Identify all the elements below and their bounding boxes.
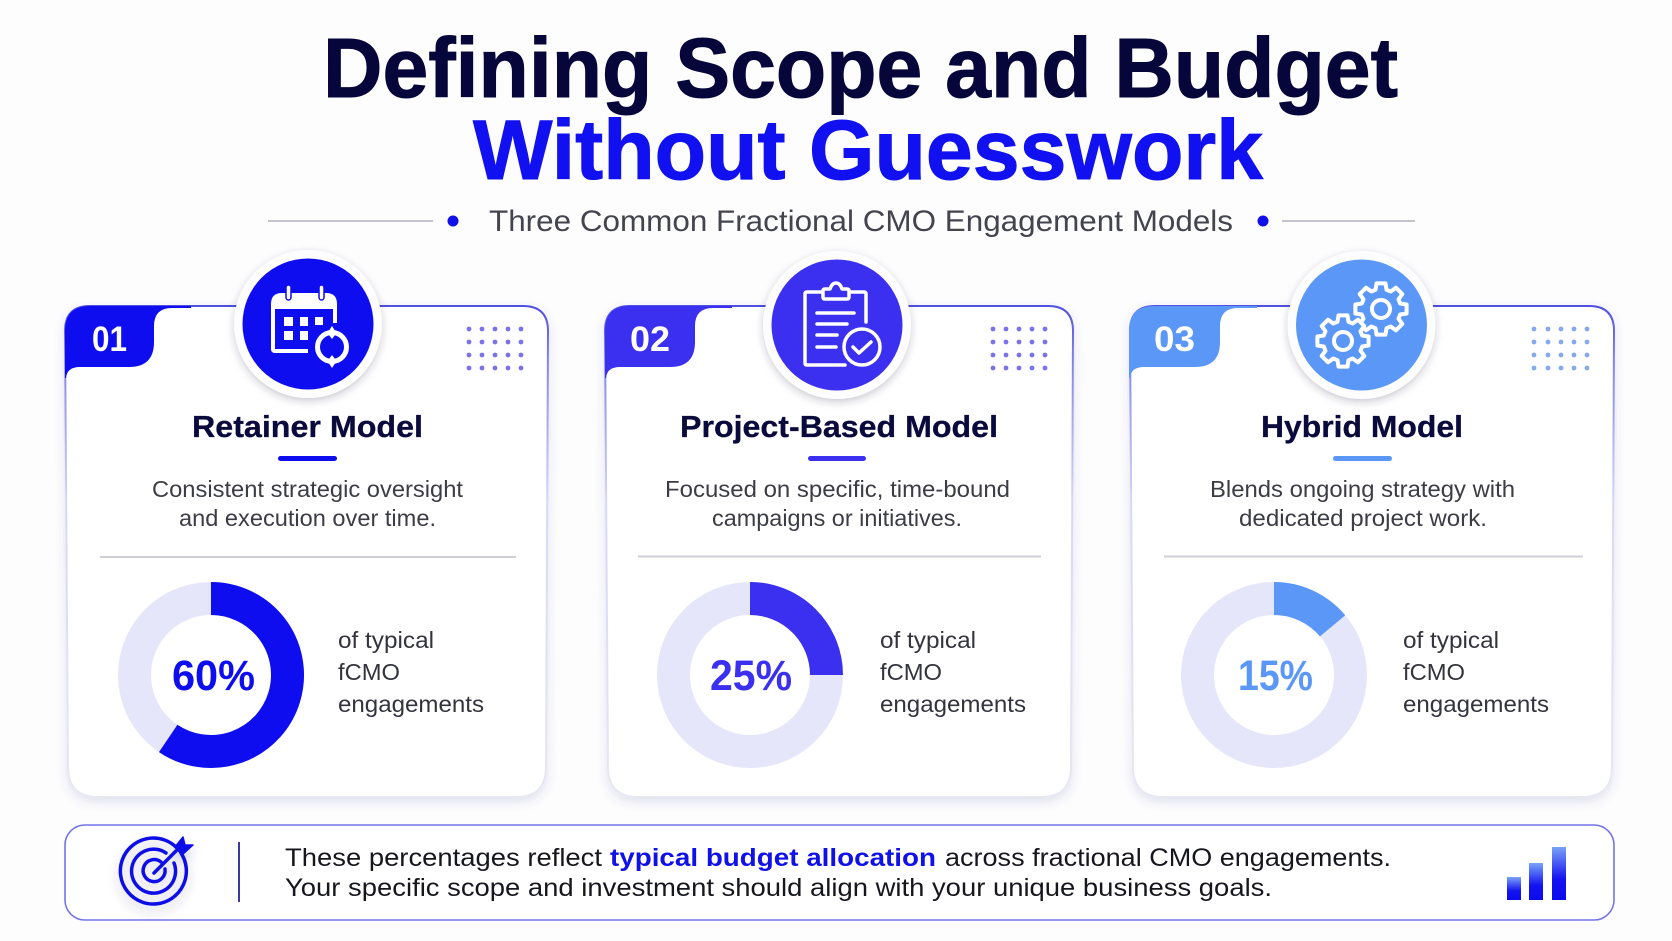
subtitle row [268, 205, 1415, 238]
callout text [285, 844, 1391, 902]
card body [605, 306, 1073, 797]
icon: target with arrow [120, 837, 193, 904]
card body [65, 306, 548, 797]
subtitle text: Three Common Fractional CMO Engagement Models [489, 205, 1233, 238]
card heading: Project-Based Model [680, 409, 998, 444]
callout text: typical budget allocation [610, 844, 936, 872]
card heading: Hybrid Model [1261, 409, 1463, 444]
number badge 01: 01 [92, 320, 127, 359]
card description: dedicated project work. [1239, 505, 1487, 531]
icon: calendar with refresh [234, 250, 382, 398]
donut caption [880, 627, 1026, 717]
number badge 02 [605, 306, 732, 378]
donut caption: of typical [1403, 627, 1499, 653]
donut caption: fCMO [338, 659, 400, 685]
callout text: across fractional CMO engagements. [945, 844, 1391, 872]
donut chart 60% [134, 598, 288, 752]
card description [152, 476, 464, 531]
card description: Consistent strategic oversight [152, 476, 464, 502]
icon: clipboard with check [763, 251, 911, 399]
donut caption [338, 627, 484, 717]
donut chart 60%: 60% [172, 652, 255, 700]
donut chart 15%: 15% [1238, 652, 1313, 700]
card description [1210, 476, 1515, 531]
donut caption: engagements [880, 691, 1026, 717]
card heading: Retainer Model [192, 409, 423, 444]
icon: bar chart [1507, 847, 1566, 900]
card description: Blends ongoing strategy with [1210, 476, 1515, 502]
number badge 03 [1129, 306, 1257, 378]
donut caption: fCMO [880, 659, 942, 685]
card description: and execution over time. [179, 505, 436, 531]
callout text: These percentages reflect [285, 844, 602, 872]
donut caption [1403, 627, 1549, 717]
callout: budget note [65, 825, 1614, 920]
number badge 03: 03 [1154, 320, 1195, 359]
donut caption: of typical [880, 627, 976, 653]
panel: retainer model [65, 250, 548, 797]
card description [665, 476, 1010, 531]
decorative dot grid [991, 327, 1047, 370]
icon: gears [1288, 251, 1436, 399]
card description: Focused on specific, time-bound [665, 476, 1010, 502]
callout text: Your specific scope and investment should align with your unique business goals. [285, 874, 1272, 902]
donut chart 25% [674, 598, 826, 752]
card description: campaigns or initiatives. [712, 505, 962, 531]
callout frame [65, 825, 1614, 920]
donut chart 25%: 25% [710, 652, 792, 700]
title line 1: Defining Scope and Budget [323, 21, 1398, 115]
number badge 02: 02 [630, 320, 670, 359]
decorative dot grid [1532, 327, 1589, 370]
card body [1130, 306, 1614, 797]
title line 2: Without Guesswork [473, 103, 1263, 197]
panel: hybrid model [1129, 251, 1614, 797]
donut caption: engagements [338, 691, 484, 717]
donut chart 15% [1198, 598, 1350, 752]
donut caption: fCMO [1403, 659, 1465, 685]
title [323, 21, 1398, 197]
number badge 01 [65, 306, 191, 378]
donut caption: of typical [338, 627, 434, 653]
donut caption: engagements [1403, 691, 1549, 717]
decorative dot grid [467, 327, 523, 370]
panel: project-based model [605, 251, 1073, 797]
